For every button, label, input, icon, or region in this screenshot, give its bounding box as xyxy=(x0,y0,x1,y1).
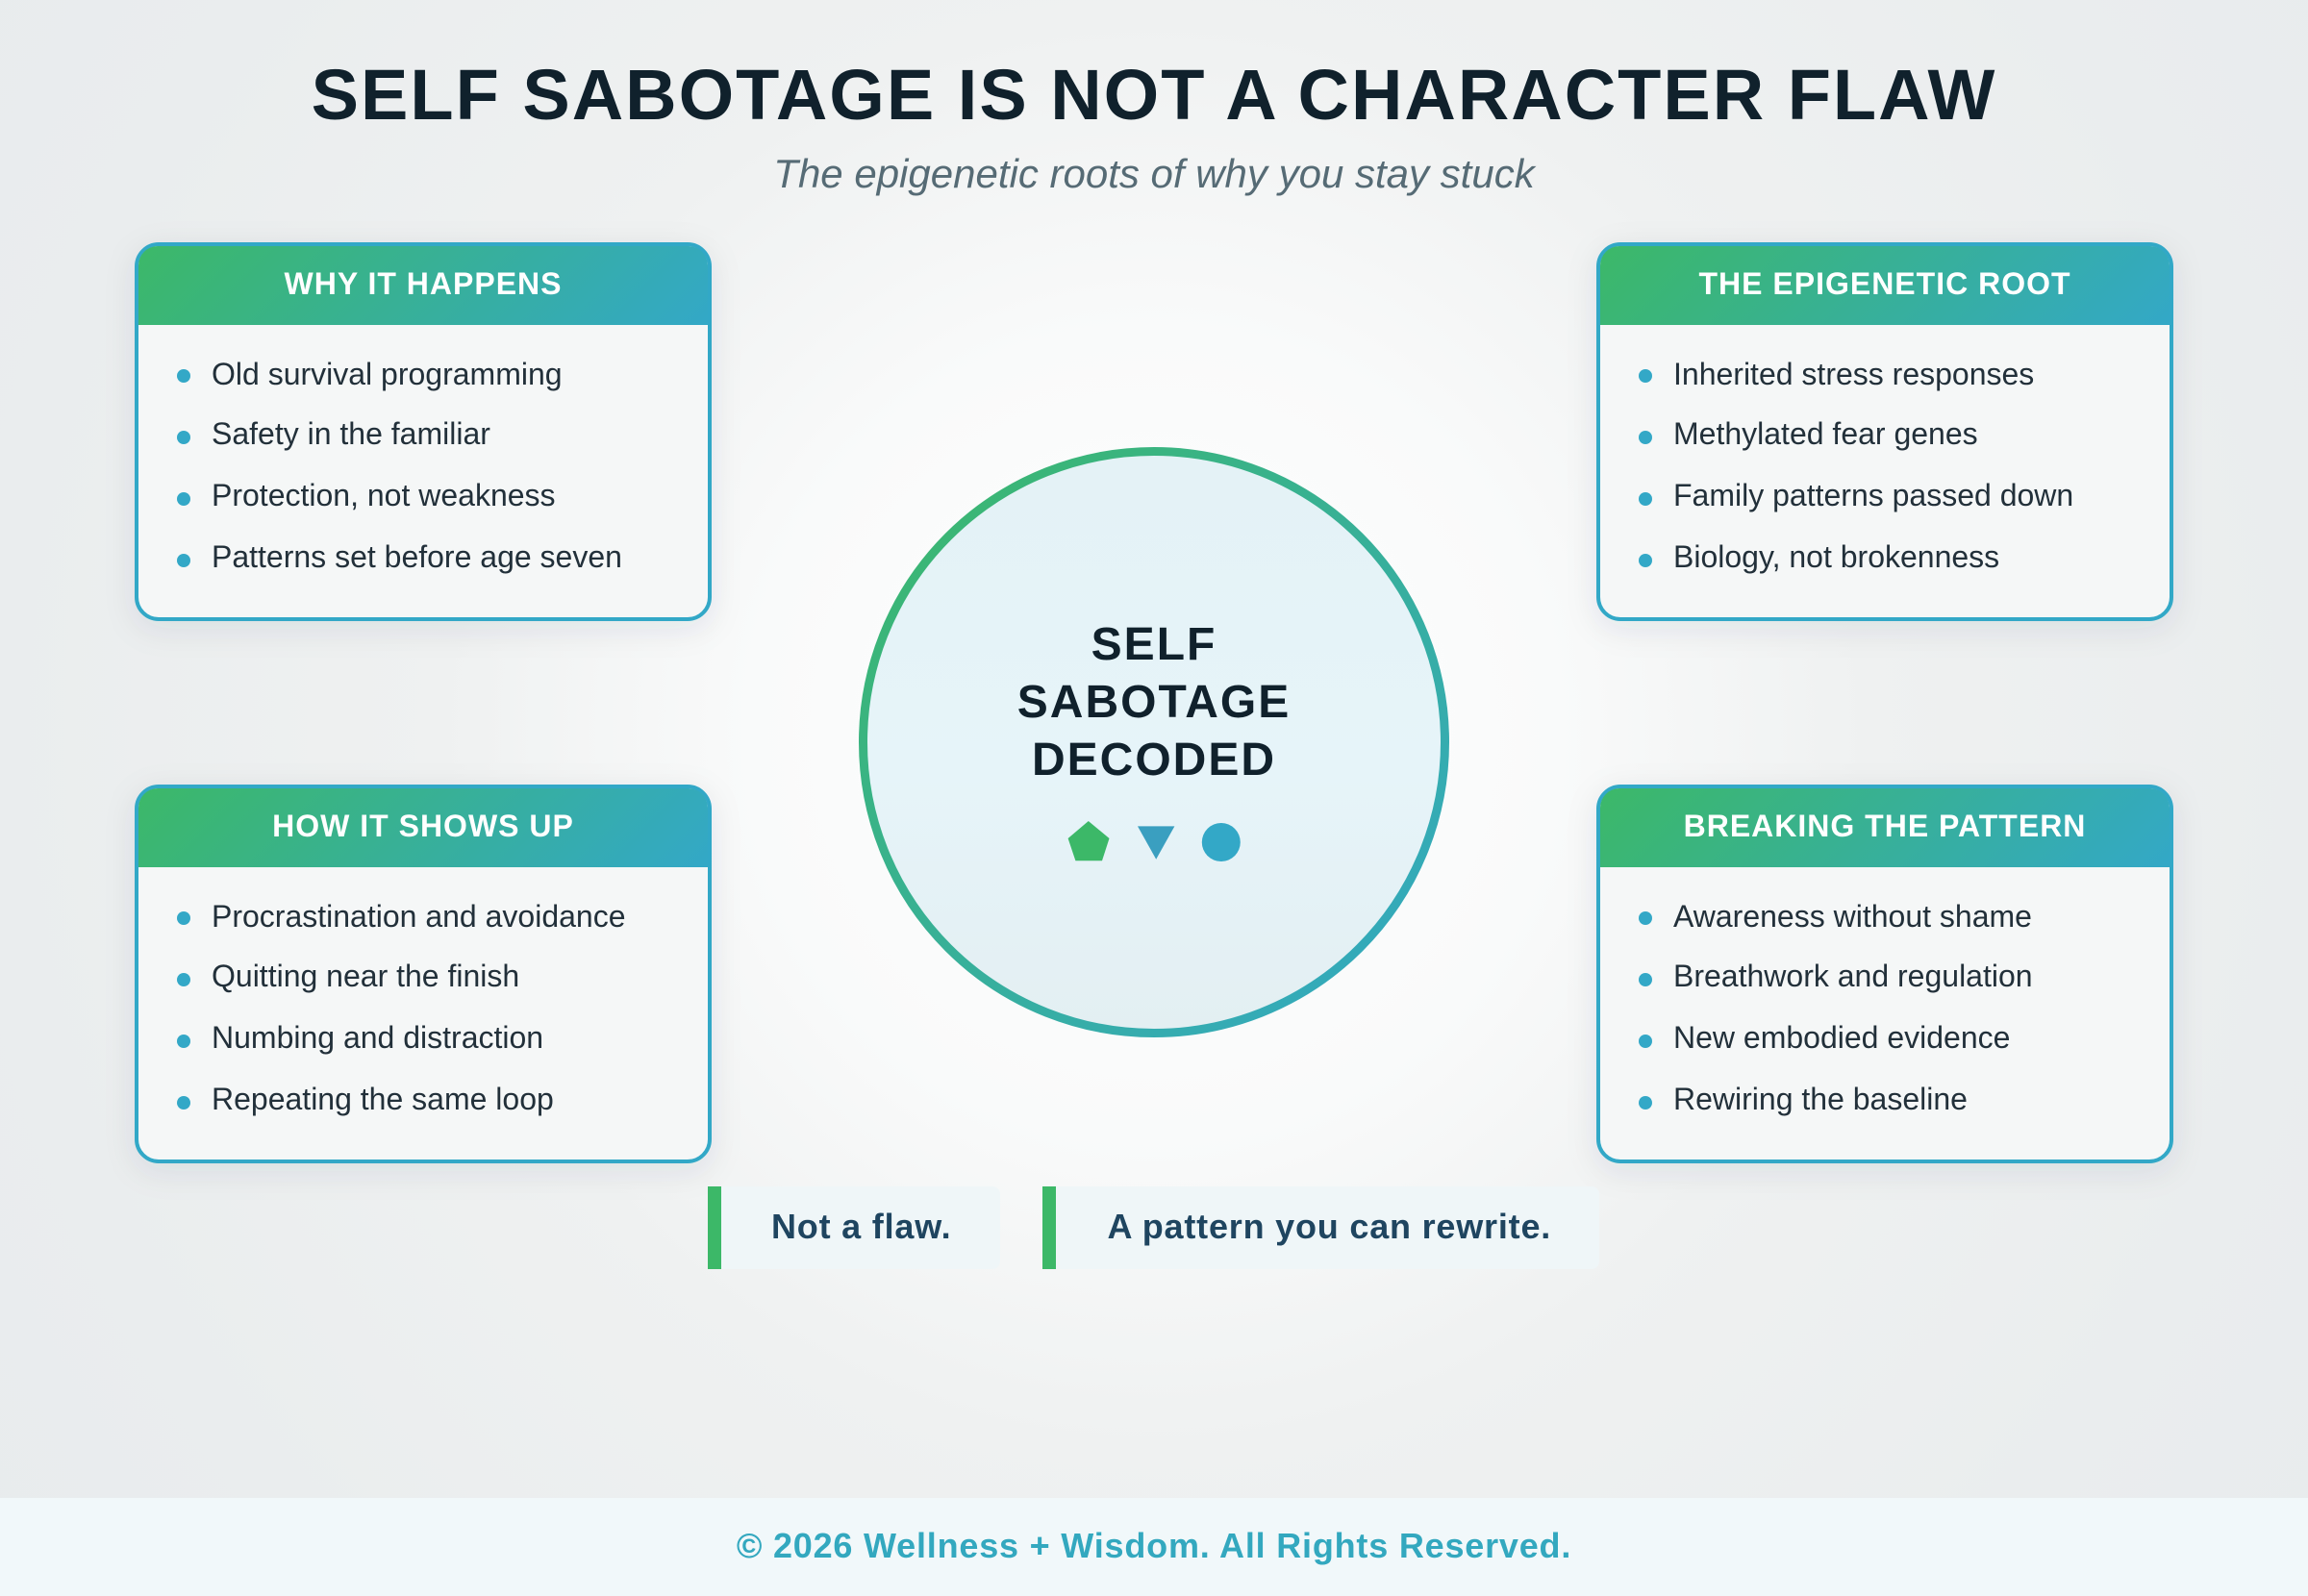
icon: circle xyxy=(1202,823,1241,861)
list: the epigenetic root: Methylated fear genes xyxy=(1673,416,1978,451)
panel: why it happens xyxy=(137,244,710,619)
list: how it shows up: Quitting near the finish xyxy=(212,959,519,993)
list: why it happens: Old survival programming xyxy=(212,357,563,391)
list: why it happens: Patterns set before age seven xyxy=(212,539,622,574)
footer xyxy=(0,1498,2308,1596)
list: how it shows up xyxy=(177,899,625,1116)
list: breaking the pattern: Breathwork and regulation xyxy=(1673,959,2033,993)
list: how it shows up: Repeating the same loop xyxy=(212,1082,554,1116)
panel header: the epigenetic root xyxy=(1600,246,2170,325)
panel header: how it shows up xyxy=(138,788,708,867)
list: the epigenetic root: Inherited stress responses xyxy=(1673,357,2034,391)
icon: inverted triangle xyxy=(1138,826,1174,860)
subtitle: The epigenetic roots of why you stay stuck xyxy=(773,151,1537,196)
callout: a pattern you can rewrite: A pattern you can rewrite. xyxy=(1108,1207,1551,1246)
center title: SABOTAGE xyxy=(1017,677,1291,728)
heading: breaking the pattern: BREAKING THE PATTERN xyxy=(1684,809,2086,843)
heading: the epigenetic root: THE EPIGENETIC ROOT xyxy=(1698,266,2071,301)
icon: pentagon xyxy=(1068,821,1110,860)
list: breaking the pattern: Awareness without shame xyxy=(1673,899,2032,934)
list: the epigenetic root: Family patterns passed down xyxy=(1673,478,2073,512)
heading: how it shows up: HOW IT SHOWS UP xyxy=(272,809,574,843)
callout: not a flaw: Not a flaw. xyxy=(771,1207,951,1246)
list: the epigenetic root xyxy=(1639,357,2073,574)
list: breaking the pattern: New embodied evidence xyxy=(1673,1020,2010,1055)
panel: how it shows up xyxy=(137,786,710,1161)
callout: not a flaw xyxy=(708,1186,1000,1269)
panel header: why it happens xyxy=(138,246,708,325)
title: SELF SABOTAGE IS NOT A CHARACTER FLAW xyxy=(312,55,1996,135)
list: the epigenetic root: Biology, not brokenness xyxy=(1673,539,1999,574)
center title: DECODED xyxy=(1032,735,1276,786)
list: how it shows up: Numbing and distraction xyxy=(212,1020,543,1055)
center circle xyxy=(864,452,1444,1033)
panel header: breaking the pattern xyxy=(1600,788,2170,867)
list: why it happens: Protection, not weakness xyxy=(212,478,556,512)
list: breaking the pattern xyxy=(1639,899,2033,1116)
panel: the epigenetic root xyxy=(1598,244,2171,619)
panel: breaking the pattern xyxy=(1598,786,2171,1161)
list: breaking the pattern: Rewiring the baseline xyxy=(1673,1082,1968,1116)
heading: why it happens: WHY IT HAPPENS xyxy=(285,266,562,301)
footer: © 2026 Wellness + Wisdom. All Rights Reserved. xyxy=(737,1526,1571,1565)
list: how it shows up: Procrastination and avoidance xyxy=(212,899,625,934)
callout: a pattern you can rewrite xyxy=(1042,1186,1599,1269)
list: why it happens: Safety in the familiar xyxy=(212,416,490,451)
center title xyxy=(1017,619,1291,786)
list: why it happens xyxy=(177,357,622,574)
center title: SELF xyxy=(1091,619,1217,670)
